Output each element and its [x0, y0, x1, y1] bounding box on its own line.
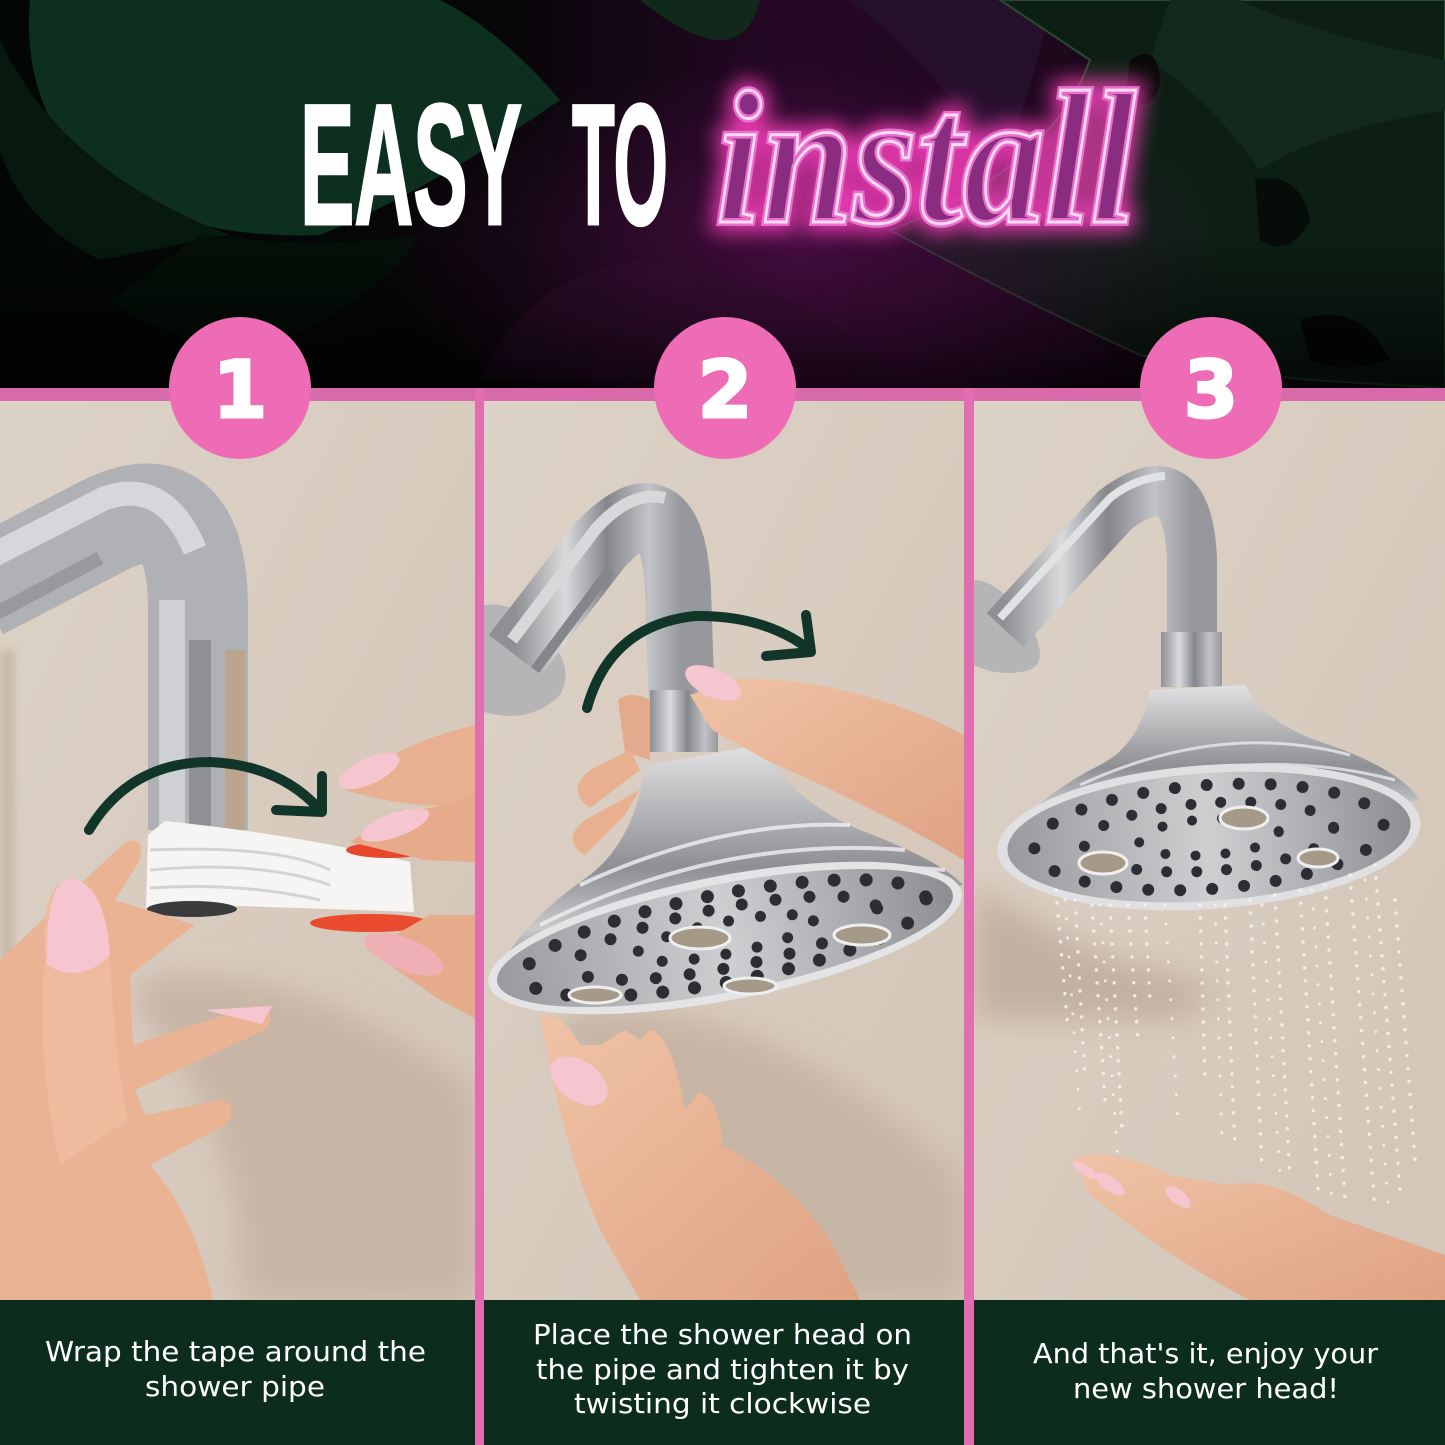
arrow: clockwise wrap	[89, 762, 322, 830]
icon: shower head	[488, 748, 963, 1014]
step badge 1: 1	[213, 346, 267, 436]
step badge 3: 3	[1184, 346, 1238, 436]
caption 1: shower pipe	[145, 1370, 325, 1403]
title: neon install: install	[716, 54, 1136, 264]
icon: cupped hand	[1071, 1154, 1445, 1300]
caption 3: new shower head!	[1073, 1372, 1339, 1405]
caption 2: Place the shower head on	[533, 1318, 912, 1351]
icon: wall flange	[974, 580, 1040, 673]
icon: lower hand	[541, 1015, 860, 1300]
caption 1: Wrap the tape around the	[45, 1335, 426, 1368]
water droplets	[1056, 865, 1415, 1210]
caption 3	[974, 1300, 1445, 1445]
title: neon install: install	[716, 54, 1136, 264]
step badge 1	[169, 317, 311, 459]
icon: shower head	[992, 685, 1426, 924]
caption 2: twisting it clockwise	[574, 1387, 871, 1420]
icon: upper hand	[572, 658, 964, 860]
title: EASY TO: EASY	[300, 69, 522, 261]
icon: chrome pipe	[512, 497, 682, 710]
step badge 3	[1140, 317, 1282, 459]
caption 3: And that's it, enjoy your	[1033, 1337, 1378, 1370]
arrow: clockwise twist	[587, 615, 811, 708]
panel 1: wrap tape	[0, 401, 475, 1300]
dividers	[0, 388, 1445, 401]
panel 2: twist head	[477, 401, 973, 1300]
header background with tropical leaves	[0, 0, 1445, 388]
step badge 2	[654, 317, 796, 459]
icon: white tape	[146, 821, 430, 932]
panel 3: enjoy shower	[974, 401, 1445, 1300]
icon: chrome pipe	[0, 494, 235, 830]
icon: chrome pipe	[1000, 476, 1192, 650]
caption 2	[484, 1300, 964, 1445]
caption 2: the pipe and tighten it by	[536, 1353, 909, 1386]
icon: right hand	[334, 725, 475, 1018]
title: neon install: install	[716, 54, 1136, 264]
icon: left hand	[0, 840, 272, 1300]
caption 1	[0, 1300, 475, 1445]
icon: wall flange	[484, 604, 566, 716]
step badge 2: 2	[698, 346, 752, 436]
text: TO	[572, 69, 668, 261]
